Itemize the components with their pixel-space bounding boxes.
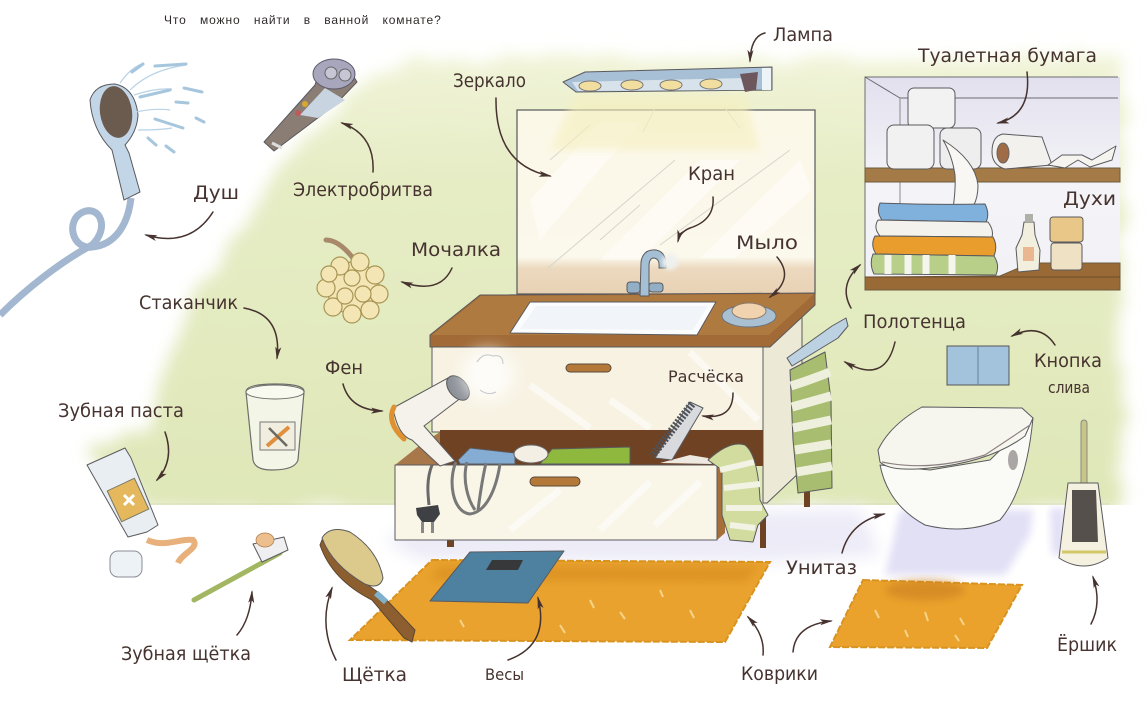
label: Кнопка слива second line: слива (1048, 378, 1090, 397)
label: Зеркало: Зеркало (453, 70, 526, 92)
flush button (947, 346, 1009, 385)
arrow: Душ (146, 212, 213, 238)
arrow: Кнопка слива (1012, 331, 1055, 345)
towel on drawer (708, 444, 768, 542)
arrow: Лампа (750, 33, 765, 61)
arrow: Полотенца to rail (845, 342, 895, 370)
label: Стаканчик: Стаканчик (139, 292, 238, 314)
label: Духи: Духи (1063, 188, 1116, 210)
scales (430, 551, 564, 603)
arrow: Полотенца to shelf (846, 265, 860, 308)
mirror (517, 95, 815, 294)
label: Расчёска: Расчёска (668, 367, 744, 386)
faucet (627, 250, 678, 296)
label: Лампа: Лампа (773, 24, 833, 46)
hairbrush (320, 530, 415, 642)
label: Душ: Душ (193, 182, 239, 204)
arrow: Мыло (770, 257, 785, 297)
arrow: Зубная щётка (237, 592, 252, 635)
label: Коврики: Коврики (741, 663, 818, 685)
arrow: Расчёска (703, 393, 733, 417)
label: Зубная паста: Зубная паста (58, 400, 184, 422)
glass (246, 384, 304, 470)
lamp (563, 67, 772, 92)
towel rail and hanging towel (787, 318, 848, 493)
label: Щётка: Щётка (342, 664, 407, 686)
arrow: Щётка (326, 588, 336, 660)
arrow: Зеркало (496, 98, 550, 176)
hair dryer (392, 349, 514, 466)
label: Электробритва: Электробритва (293, 179, 433, 201)
rug large (350, 560, 770, 642)
label: Весы: Весы (485, 665, 524, 684)
title: Что можно найти в ванной комнате? (164, 13, 442, 27)
toilet (878, 407, 1033, 529)
label: Фен: Фен (325, 357, 363, 379)
toothbrush (194, 533, 288, 600)
bath sponge (317, 240, 388, 323)
label: Кнопка слива: Кнопка (1034, 350, 1102, 372)
stacked towels (871, 203, 998, 275)
label: Туалетная бумага: Туалетная бумага (917, 45, 1097, 67)
arrow: Унитаз (842, 514, 884, 553)
toothpaste (87, 448, 195, 577)
label: Кран: Кран (688, 163, 735, 185)
perfume bottles (1016, 214, 1083, 272)
arrow: Зубная паста (157, 432, 169, 480)
arrow: Стаканчик (244, 308, 278, 358)
arrow: Туалетная бумага (998, 72, 1028, 123)
label: Мочалка: Мочалка (411, 239, 501, 261)
electric shaver (264, 59, 357, 151)
label: Унитаз: Унитаз (786, 557, 857, 579)
arrow: Коврики right (793, 621, 831, 652)
arrow: Кран (678, 197, 713, 241)
toilet paper (887, 88, 1116, 218)
comb (652, 402, 703, 460)
arrow: Электробритва (342, 123, 373, 172)
arrow: Мочалка (402, 268, 452, 286)
rug small (830, 580, 1022, 648)
vanity cabinet (430, 293, 815, 548)
soap dish (722, 303, 776, 327)
shower head and hose (0, 63, 204, 315)
label: Зубная щётка: Зубная щётка (121, 643, 251, 665)
arrow: Ёршик (1091, 577, 1097, 624)
label: Полотенца: Полотенца (863, 311, 966, 333)
arrow: Фен (343, 384, 382, 411)
label: Мыло: Мыло (736, 232, 798, 254)
arrow: Весы (508, 598, 541, 660)
arrow: Коврики left (748, 617, 763, 655)
toilet brush (1059, 420, 1108, 566)
sink (510, 302, 716, 335)
label: Ёршик: Ёршик (1057, 633, 1117, 656)
shelves niche (865, 77, 1120, 290)
open drawer (395, 432, 725, 540)
